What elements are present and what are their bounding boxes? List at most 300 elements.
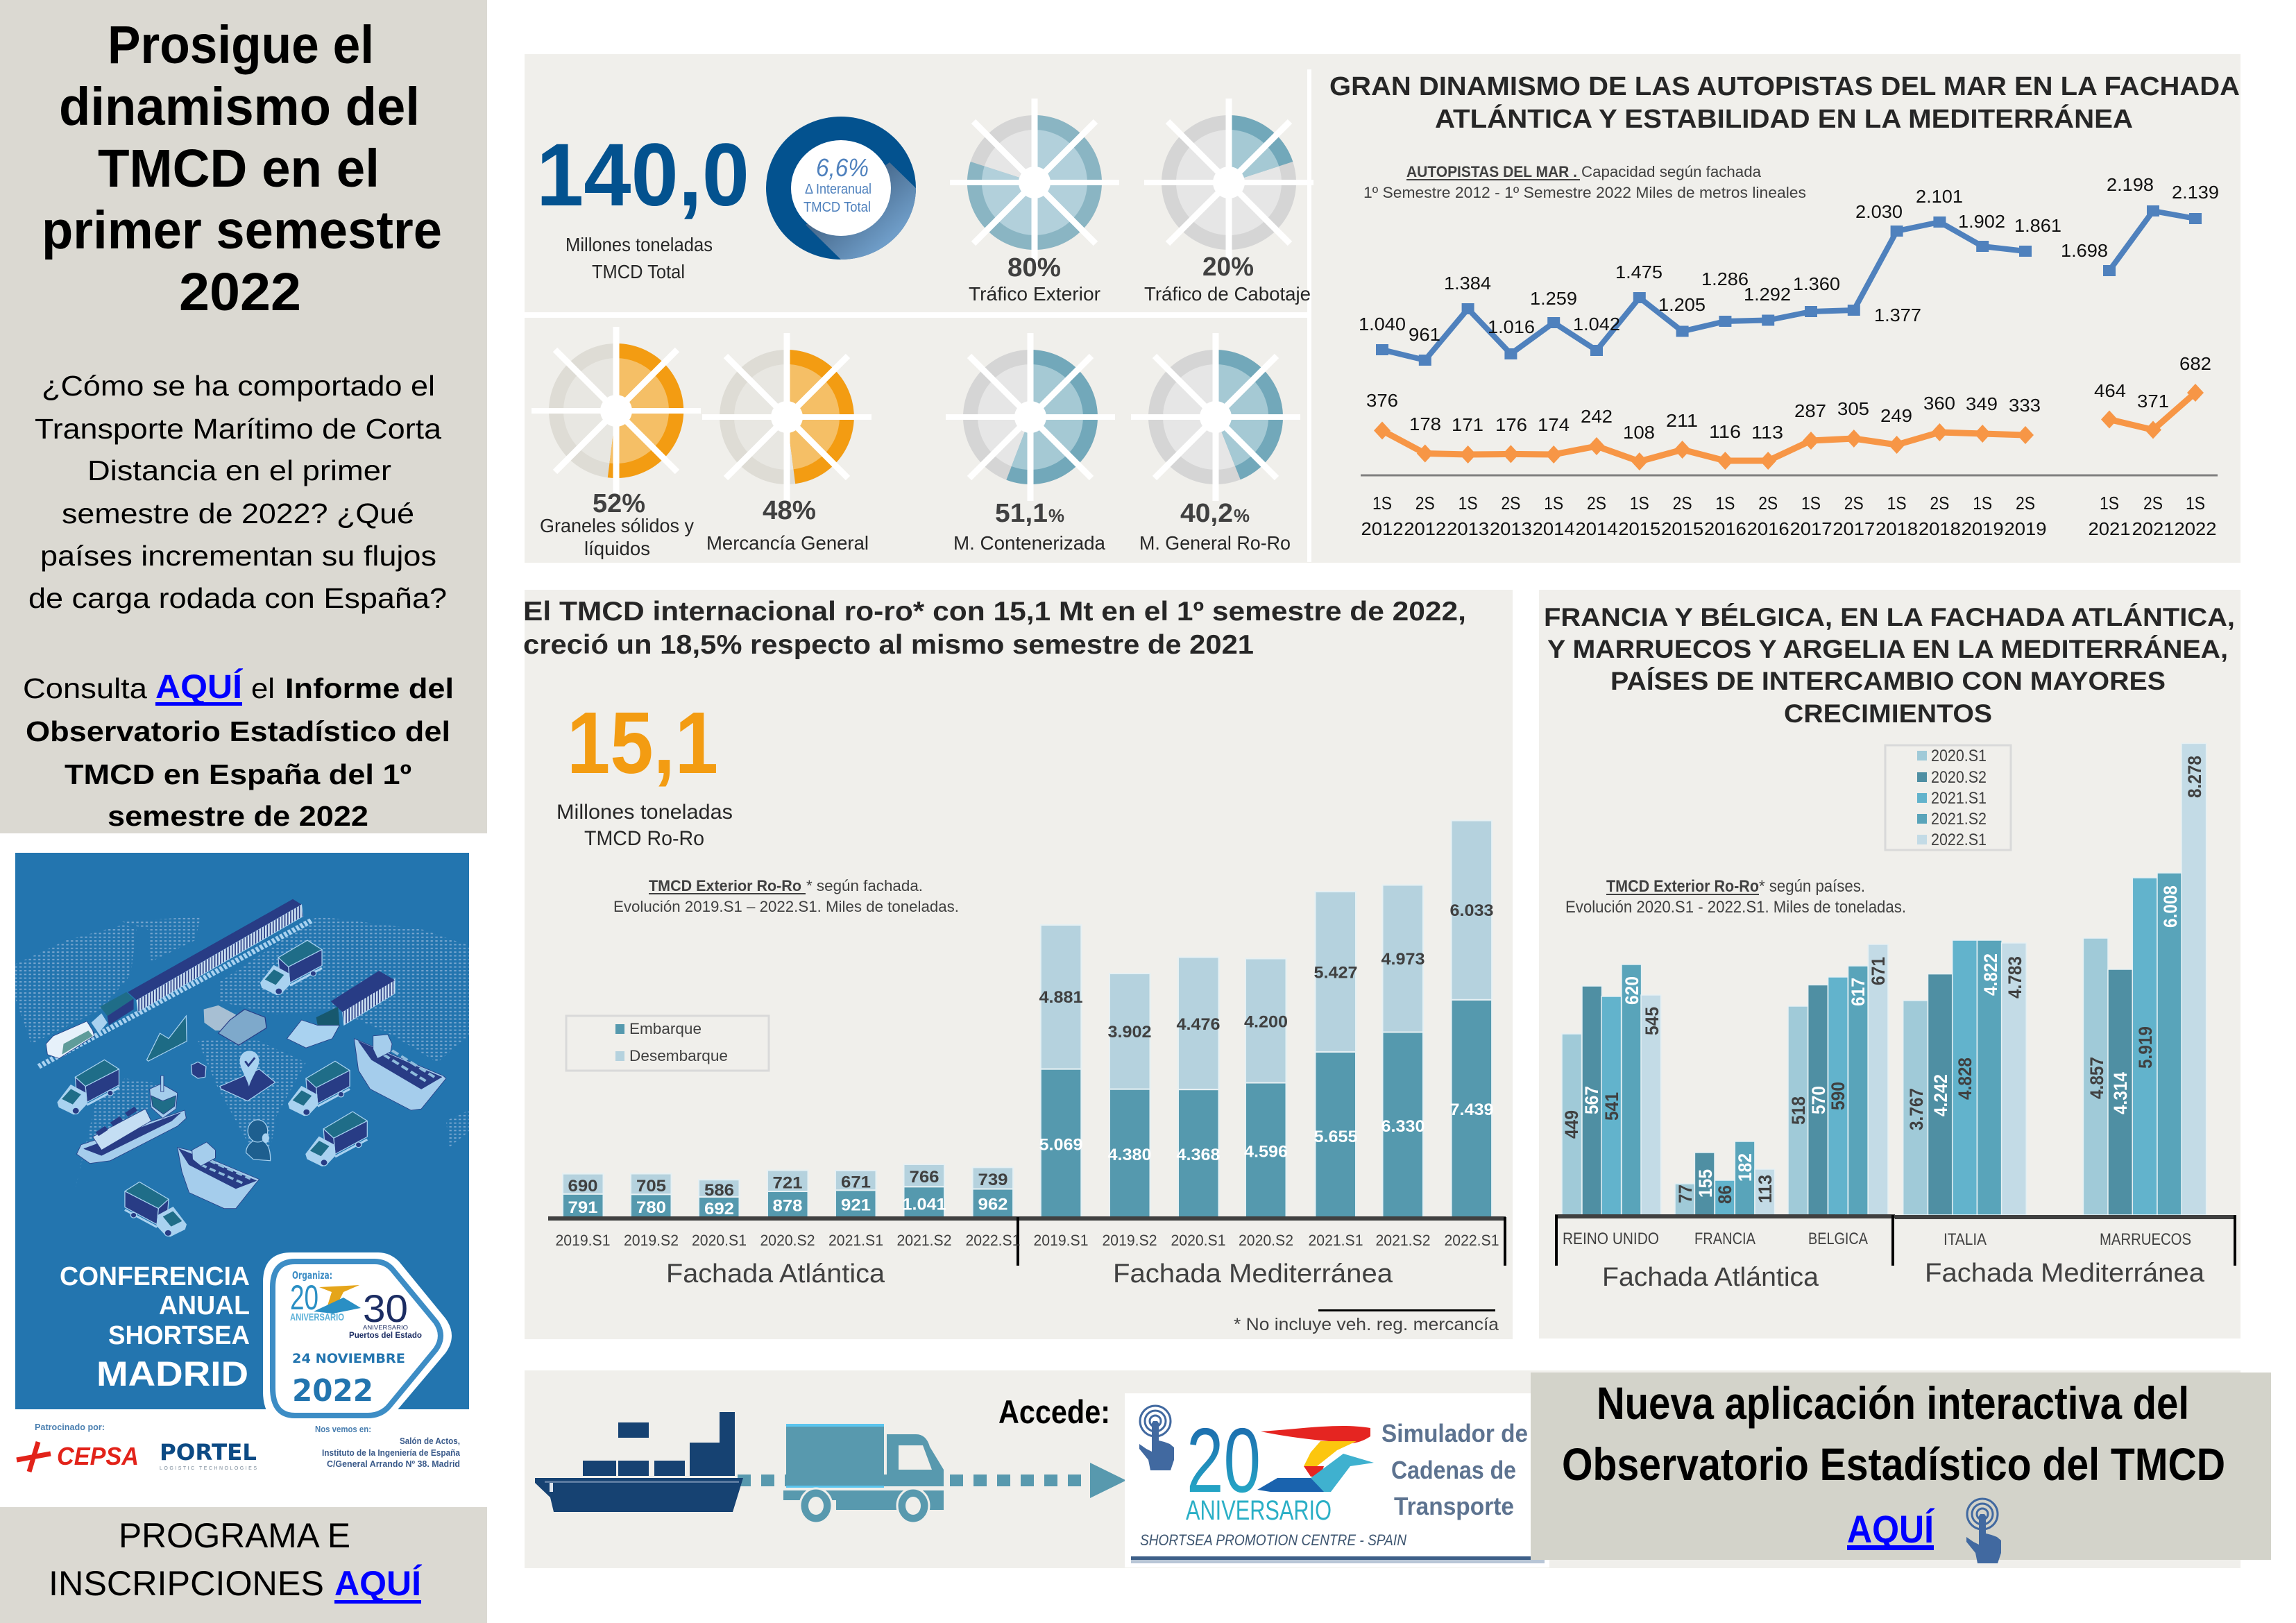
legend: 2022.S1 — [1931, 831, 1987, 849]
kpi: 140,0: 140,0 — [536, 126, 749, 225]
atlantic data labels: 2.101 — [1916, 186, 1963, 207]
category labels: 2022.S1 — [966, 1232, 1020, 1249]
rotated value labels: 5.919 — [2135, 1026, 2156, 1069]
x axis labels: 1S — [2186, 493, 2205, 513]
atlantic data labels: 2.030 — [1855, 201, 1903, 222]
x axis labels: 2015 — [1618, 518, 1660, 539]
mediterranean data labels: 171 — [1452, 414, 1483, 435]
embarque value labels: 791 — [568, 1198, 598, 1217]
mediterranean data labels: 360 — [1923, 393, 1955, 414]
atlantic data labels: 1.292 — [1744, 284, 1791, 305]
intro paragraph: Transporte Marítimo de Corta — [35, 413, 441, 445]
logo flame — [1257, 1426, 1374, 1492]
mediterranean data labels: 349 — [1966, 393, 1998, 414]
embarque value labels: 878 — [773, 1197, 802, 1216]
category labels: 2020.S2 — [760, 1232, 815, 1249]
x axis labels: 2016 — [1747, 518, 1789, 539]
embarque value labels: 4.596 — [1244, 1143, 1288, 1162]
donut: interanual: 6,6% — [816, 153, 869, 182]
venue — [315, 1424, 461, 1469]
x axis labels: 2015 — [1661, 518, 1703, 539]
atlantic data labels: 1.360 — [1793, 273, 1840, 294]
x axis labels: 2S — [2143, 493, 2163, 513]
rotated value labels: 4.314 — [2110, 1072, 2131, 1114]
link paragraph: informe del observatorio: Consulta — [23, 672, 147, 704]
legend: 2020.S1 — [1931, 747, 1987, 765]
gauge: trafico de cabotaje 20%: Tráfico de Cabotaje — [1144, 283, 1311, 305]
category labels: 2019.S2 — [624, 1232, 679, 1249]
group labels: Fachada Mediterránea — [1925, 1259, 2205, 1288]
intro paragraph: países incrementan su flujos — [40, 540, 436, 572]
embarque value labels: 962 — [978, 1195, 1007, 1214]
mediterranean data labels: 176 — [1495, 414, 1527, 435]
date badge: 2022 — [292, 1373, 373, 1409]
x axis labels: 2017 — [1832, 518, 1875, 539]
trailer and tractor right — [287, 971, 395, 1048]
desembarque value labels: 3.902 — [1107, 1023, 1152, 1042]
poster illustration: world map and vehicles — [15, 899, 469, 1237]
x axis labels: 2012 — [1361, 518, 1403, 539]
donut: interanual — [766, 117, 919, 264]
heading: El TMCD internacional ro-ro* con 15,1 Mt en el 1º semestre de 2022, — [523, 597, 1466, 627]
embarque value labels: 5.069 — [1039, 1135, 1082, 1155]
simulator logo — [1125, 1393, 1549, 1567]
panel: simulador banner — [525, 1370, 2240, 1568]
venue: Salón de Actos, — [400, 1436, 460, 1446]
sponsors: Patrocinado por: — [35, 1422, 105, 1432]
x axis labels: 2S — [2016, 493, 2035, 513]
title: Prosigue el — [108, 15, 374, 75]
dotted arrow — [738, 1463, 1126, 1498]
x axis labels: 1S — [2100, 493, 2119, 513]
rotated value labels: 541 — [1601, 1092, 1622, 1121]
series: atlantic — [1382, 211, 2195, 360]
x axis labels: 2S — [1844, 493, 1864, 513]
legend — [566, 1016, 769, 1071]
desembarque value labels: 766 — [909, 1168, 939, 1187]
kpi: 15,1: Millones toneladas — [556, 801, 733, 824]
gauge: mercancia general 48%: 48% — [763, 496, 816, 525]
mediterranean data labels: 174 — [1538, 414, 1570, 435]
rotated value labels: 4.828 — [1955, 1057, 1975, 1100]
icon: tapping hand — [1966, 1499, 2001, 1563]
location pin on plate — [220, 1051, 275, 1101]
date badge: 30 — [363, 1286, 408, 1330]
chart subtitle — [1363, 163, 1806, 201]
gauge: graneles 52%: 52% — [593, 489, 645, 518]
legend: Embarque — [629, 1020, 701, 1037]
category labels: 2019.S2 — [1102, 1232, 1157, 1249]
atlantic data labels: 1.698 — [2061, 240, 2108, 261]
chart subtitle: * según fachada. — [806, 877, 923, 894]
reach stacker with grey container — [204, 1005, 266, 1045]
poster headline: SHORTSEA — [108, 1321, 250, 1350]
atlantic data labels: 1.377 — [1874, 305, 1921, 325]
kpi: 140,0: Millones toneladas — [566, 234, 713, 255]
category labels: 2021.S1 — [828, 1232, 883, 1249]
panel: programa e inscripciones: AQUÍ — [334, 1564, 422, 1603]
heading — [523, 597, 1466, 660]
panel: programa e inscripciones — [0, 1507, 487, 1623]
footnote: * No incluye veh. reg. mercancía — [1234, 1315, 1499, 1334]
mediterranean data labels: 333 — [2009, 395, 2041, 416]
category labels: 2020.S2 — [1239, 1232, 1293, 1249]
embarque value labels: 921 — [841, 1196, 871, 1215]
gauge: graneles 52%: líquidos — [584, 538, 650, 559]
atlantic data labels: 1.286 — [1701, 269, 1749, 289]
embarque value labels: 7.439 — [1450, 1101, 1493, 1119]
gauge: graneles 52% — [532, 327, 701, 559]
desembarque value labels: 586 — [704, 1181, 734, 1200]
sponsors: PORTEL — [160, 1439, 257, 1465]
link paragraph: informe del observatorio: TMCD en España del 1º — [65, 758, 411, 790]
mediterranean data labels: 376 — [1366, 390, 1398, 411]
rotated value labels: 86 — [1715, 1185, 1735, 1204]
link paragraph: informe del observatorio: semestre de 2022 — [108, 800, 368, 832]
venue: Nos vemos en: — [315, 1424, 371, 1434]
call to action: accede: Accede: — [998, 1393, 1110, 1430]
category labels: 2019.S1 — [1034, 1232, 1088, 1249]
rotated value labels: 545 — [1642, 1007, 1663, 1035]
rotated value labels: 77 — [1675, 1184, 1696, 1203]
atlantic data labels: 1.016 — [1488, 316, 1535, 337]
ro-ro ship center — [178, 1142, 260, 1209]
panel: tmcd total kpis — [525, 54, 2240, 563]
heading: creció un 18,5% respecto al mismo semestre de 2021 — [523, 630, 1254, 660]
x axis labels — [1361, 493, 2216, 539]
rotated value labels: 671 — [1868, 957, 1889, 985]
group labels — [1602, 1259, 2205, 1292]
country labels: MARRUECOS — [2100, 1230, 2191, 1249]
x axis labels: 2019 — [1962, 518, 2004, 539]
chart subtitle: 1º Semestre 2012 - 1º Semestre 2022 Miles de metros lineales — [1363, 184, 1806, 201]
panel: programa e inscripciones: INSCRIPCIONES — [49, 1564, 324, 1603]
poster: conferencia anual shortsea — [15, 853, 469, 1479]
heading: autopistas del mar: GRAN DINAMISMO DE LAS AUTOPISTAS DEL MAR EN LA FACHADA — [1329, 72, 2240, 101]
x axis labels: 2S — [1758, 493, 1778, 513]
simulator logo: 20 — [1187, 1409, 1261, 1511]
venue: C/General Arrando Nº 38. Madrid — [327, 1459, 460, 1469]
panel: programa e inscripciones: PROGRAMA E — [119, 1516, 350, 1555]
embarque value labels: 780 — [636, 1198, 666, 1217]
train with wagons — [39, 899, 312, 1067]
kpi: 15,1: TMCD Ro-Ro — [584, 827, 704, 850]
mediterranean data labels: 108 — [1623, 422, 1655, 443]
x axis labels: 2019 — [2004, 518, 2047, 539]
atlantic data labels: 2.139 — [2172, 182, 2219, 203]
chart icon — [147, 1016, 187, 1061]
atlantic data labels: 1.384 — [1444, 273, 1491, 294]
x axis labels: 1S — [1544, 493, 1563, 513]
heading: FRANCIA Y BÉLGICA, EN LA FACHADA ATLÁNTICA, — [1544, 603, 2235, 631]
mediterranean data labels: 211 — [1666, 410, 1698, 431]
desembarque value labels: 4.200 — [1244, 1013, 1288, 1032]
gauge: mercancia general 48%: Mercancía General — [706, 532, 869, 554]
country labels — [1563, 1230, 2191, 1249]
intro paragraph — [28, 370, 447, 614]
x axis labels: 2022 — [2175, 518, 2216, 539]
x axis labels: 1S — [1973, 493, 1992, 513]
x axis labels: 2S — [1415, 493, 1435, 513]
link paragraph: informe del observatorio: AQUÍ — [155, 668, 244, 706]
sponsors — [17, 1422, 257, 1472]
gauge: m. contenerizada 51,1%: M. Contenerizada — [953, 532, 1105, 554]
atlantic data labels: 1.861 — [2014, 215, 2061, 236]
gauge: m. general ro-ro 40,2%: M. General Ro-Ro — [1139, 532, 1291, 554]
bars: atlantic countries — [1562, 944, 1888, 1215]
mediterranean data labels: 113 — [1751, 422, 1783, 443]
chart subtitle: TMCD Exterior Ro-Ro — [649, 877, 801, 894]
gauge: graneles 52%: Graneles sólidos y — [540, 515, 694, 536]
link paragraph: informe del observatorio: el — [251, 672, 275, 704]
atlantic data labels: 1.259 — [1530, 288, 1577, 309]
series: mediterranean — [1382, 393, 2195, 461]
desembarque value labels: 4.881 — [1039, 988, 1082, 1007]
rotated value labels: 620 — [1622, 976, 1642, 1005]
sponsors: LOGISTIC TECHNOLOGIES — [160, 1466, 257, 1471]
date badge: Organiza: — [292, 1269, 332, 1282]
chart subtitle: Evolución 2020.S1 - 2022.S1. Miles de toneladas. — [1565, 898, 1906, 917]
panel: francia y belgica — [1539, 590, 2240, 1339]
x axis labels: 2S — [1673, 493, 1692, 513]
embarque value labels: 4.368 — [1177, 1146, 1220, 1164]
chart subtitle — [1565, 877, 1906, 917]
donut: interanual: TMCD Total — [803, 200, 871, 215]
date badge: 20 — [290, 1278, 318, 1317]
grouped bar chart — [1555, 743, 2236, 1292]
icon: tapping hand — [1139, 1406, 1174, 1470]
rotated value labels: 518 — [1788, 1096, 1809, 1125]
title: dinamismo del — [59, 77, 420, 137]
mediterranean data labels: 371 — [2137, 391, 2169, 411]
simulator logo: SHORTSEA PROMOTION CENTRE - SPAIN — [1140, 1531, 1406, 1549]
desembarque value labels — [568, 901, 1493, 1200]
atlantic data labels: 2.198 — [2107, 174, 2154, 195]
kpi: 140,0: TMCD Total — [592, 261, 685, 282]
desembarque value labels: 705 — [636, 1177, 666, 1196]
desembarque value labels: 4.973 — [1381, 950, 1425, 969]
rotated value labels — [1561, 756, 2205, 1204]
icon: ship — [535, 1412, 743, 1512]
venue: Instituto de la Ingeniería de España — [322, 1447, 461, 1458]
desembarque value labels: 671 — [841, 1173, 871, 1192]
bars: desembarque — [563, 820, 1492, 1197]
panel: nueva aplicacion interactiva: AQUÍ — [1847, 1507, 1934, 1551]
link paragraph: informe del observatorio: Observatorio Estadístico del — [26, 715, 450, 747]
rotated value labels: 617 — [1848, 978, 1869, 1006]
intro paragraph: Distancia en el primer — [87, 454, 391, 486]
atlantic data labels: 1.205 — [1658, 294, 1706, 315]
x axis labels: 2012 — [1404, 518, 1446, 539]
operator with headset — [246, 1120, 271, 1161]
gauge: trafico de cabotaje 20% — [1144, 99, 1313, 305]
title: TMCD en el — [98, 139, 380, 198]
chart subtitle: * según países. — [1759, 877, 1865, 896]
box icon — [191, 1062, 206, 1078]
kpi: 15,1: 15,1 — [567, 694, 718, 792]
group labels — [666, 1259, 1393, 1289]
embarque value labels: 4.380 — [1107, 1146, 1152, 1164]
mediterranean data labels: 305 — [1837, 398, 1869, 419]
x axis labels: 1S — [1372, 493, 1392, 513]
ro-ro ship right — [354, 1035, 446, 1110]
line chart: autopistas del mar — [1359, 163, 2219, 539]
heading: CRECIMIENTOS — [1784, 699, 1992, 728]
donut: interanual: Δ Interanual — [805, 182, 871, 197]
kpi: 15,1 — [556, 694, 733, 850]
chart subtitle: Capacidad según fachada — [1581, 163, 1762, 180]
bars: mediterranean countries — [1903, 743, 2206, 1215]
atlantic data labels: 1.042 — [1573, 314, 1620, 334]
container ship — [76, 1076, 186, 1164]
country labels: FRANCIA — [1694, 1230, 1755, 1248]
rotated value labels: 4.242 — [1930, 1074, 1951, 1116]
x axis labels: 2013 — [1447, 518, 1489, 539]
desembarque value labels: 5.427 — [1314, 963, 1357, 983]
date badge — [263, 1252, 452, 1422]
mediterranean data labels: 242 — [1581, 406, 1613, 427]
mediterranean data labels: 464 — [2094, 380, 2126, 401]
atlantic data labels: 1.475 — [1615, 262, 1663, 282]
intro paragraph: semestre de 2022? ¿Qué — [62, 498, 414, 529]
heading: autopistas del mar: ATLÁNTICA Y ESTABILIDAD EN LA MEDITERRÁNEA — [1435, 103, 2133, 134]
x axis labels: 1S — [1887, 493, 1907, 513]
date badge: ANIVERSARIO — [363, 1325, 408, 1331]
embarque value labels: 1.041 — [902, 1195, 946, 1214]
x axis labels: 2016 — [1704, 518, 1746, 539]
category labels: 2020.S1 — [1171, 1232, 1225, 1249]
embarque value labels: 692 — [704, 1200, 734, 1218]
link paragraph: informe del observatorio: Informe del — [285, 672, 454, 704]
x axis labels: 2018 — [1919, 518, 1961, 539]
heading: autopistas del mar — [1329, 72, 2240, 134]
atlantic data labels: 961 — [1409, 324, 1440, 345]
poster white strip — [15, 1409, 469, 1479]
gauge: trafico exterior 80% — [950, 99, 1119, 305]
legend: 2021.S1 — [1931, 789, 1987, 808]
panel: left title and intro — [0, 0, 487, 833]
x axis labels: 2S — [1501, 493, 1520, 513]
country labels: BELGICA — [1808, 1230, 1868, 1248]
gauge: m. general ro-ro 40,2% — [1131, 333, 1300, 554]
embarque value labels — [568, 1101, 1493, 1218]
x axis labels: 1S — [1801, 493, 1821, 513]
rotated value labels: 3.767 — [1906, 1088, 1927, 1130]
country labels: REINO UNIDO — [1563, 1230, 1659, 1248]
x axis labels: 2013 — [1490, 518, 1532, 539]
panel: nueva aplicacion interactiva — [1531, 1373, 2271, 1563]
rotated value labels: 155 — [1695, 1169, 1716, 1198]
mediterranean data labels: 116 — [1709, 421, 1741, 442]
mediterranean data labels — [1366, 353, 2211, 443]
mediterranean data labels: 249 — [1880, 405, 1912, 426]
poster headline: CONFERENCIA — [60, 1262, 250, 1291]
group labels: Fachada Mediterránea — [1113, 1259, 1393, 1289]
heading: Y MARRUECOS Y ARGELIA EN LA MEDITERRÁNEA, — [1547, 635, 2228, 663]
title — [42, 15, 442, 322]
heading — [1544, 603, 2235, 728]
x axis labels: 2S — [1587, 493, 1606, 513]
x axis labels: 1S — [1715, 493, 1735, 513]
rotated value labels: 570 — [1808, 1086, 1829, 1114]
poster headline — [60, 1262, 250, 1393]
poster headline: ANUAL — [159, 1291, 250, 1320]
gauge: trafico exterior 80%: 80% — [1007, 253, 1061, 282]
x axis labels: 1S — [1459, 493, 1478, 513]
rotated value labels: 4.822 — [1980, 953, 2001, 996]
simulator logo: Simulador de — [1381, 1419, 1528, 1447]
chart subtitle: TMCD Exterior Ro-Ro — [1606, 877, 1759, 896]
x axis labels: 2021 — [2089, 518, 2130, 539]
rotated value labels: 182 — [1735, 1153, 1755, 1182]
rotated value labels: 567 — [1581, 1086, 1602, 1114]
heading: PAÍSES DE INTERCAMBIO CON MAYORES — [1610, 667, 2166, 695]
desembarque value labels: 6.033 — [1450, 901, 1493, 920]
date badge: 24 NOVIEMBRE — [292, 1351, 405, 1366]
date badge: Puertos del Estado — [349, 1330, 422, 1340]
category labels: 2019.S1 — [555, 1232, 611, 1249]
gauge: m. contenerizada 51,1%: % — [1048, 505, 1064, 526]
desembarque value labels: 4.476 — [1177, 1015, 1220, 1034]
mediterranean data labels: 178 — [1409, 414, 1441, 434]
embarque value labels: 5.655 — [1314, 1128, 1357, 1146]
rotated value labels: 4.783 — [2005, 956, 2025, 999]
x axis labels: 2S — [1930, 493, 1949, 513]
panel: nueva aplicacion interactiva: Nueva aplicación interactiva del — [1597, 1377, 2189, 1429]
group labels: Fachada Atlántica — [666, 1259, 885, 1289]
trucks — [58, 1060, 119, 1114]
category labels — [555, 1232, 1499, 1249]
legend: 2021.S2 — [1931, 810, 1987, 829]
gauge: m. contenerizada 51,1%: 51,1 — [995, 499, 1048, 528]
rotated value labels: 8.278 — [2184, 756, 2205, 798]
x axis labels: 1S — [1630, 493, 1649, 513]
intro paragraph: ¿Cómo se ha comportado el — [42, 370, 435, 402]
legend: Desembarque — [629, 1047, 728, 1064]
chart subtitle — [613, 877, 959, 915]
chart subtitle: Evolución 2019.S1 – 2022.S1. Miles de toneladas. — [613, 898, 959, 915]
gauge: m. general ro-ro 40,2%: 40,2 — [1180, 499, 1233, 528]
desembarque value labels: 690 — [568, 1177, 598, 1196]
rotated value labels: 590 — [1828, 1082, 1848, 1110]
country labels: ITALIA — [1944, 1230, 1987, 1249]
category labels: 2022.S1 — [1445, 1232, 1499, 1249]
stacked bar chart — [548, 820, 1506, 1289]
category labels: 2020.S1 — [692, 1232, 747, 1249]
gauge: m. general ro-ro 40,2%: % — [1234, 505, 1250, 526]
intro paragraph: de carga rodada con España? — [28, 582, 447, 614]
x axis labels: 2014 — [1533, 518, 1575, 539]
chart subtitle: AUTOPISTAS DEL MAR . — [1406, 163, 1577, 180]
category labels: 2021.S2 — [896, 1232, 952, 1249]
sponsors: CEPSA — [57, 1442, 139, 1470]
link paragraph: informe del observatorio — [23, 668, 454, 832]
group labels: Fachada Atlántica — [1602, 1263, 1819, 1292]
category labels: 2021.S2 — [1375, 1232, 1431, 1249]
x axis labels: 2018 — [1876, 518, 1918, 539]
mediterranean data labels: 682 — [2179, 353, 2211, 374]
legend — [1885, 745, 2011, 850]
atlantic data labels — [1359, 174, 2219, 345]
rotated value labels: 6.008 — [2160, 885, 2181, 928]
legend: 2020.S2 — [1931, 768, 1987, 787]
kpi: 140,0 — [536, 126, 749, 282]
bars: embarque — [563, 1000, 1492, 1217]
title: primer semestre — [42, 201, 442, 260]
atlantic data labels: 1.902 — [1958, 211, 2005, 232]
poster headline: MADRID — [96, 1354, 248, 1393]
desembarque value labels: 721 — [773, 1174, 802, 1192]
